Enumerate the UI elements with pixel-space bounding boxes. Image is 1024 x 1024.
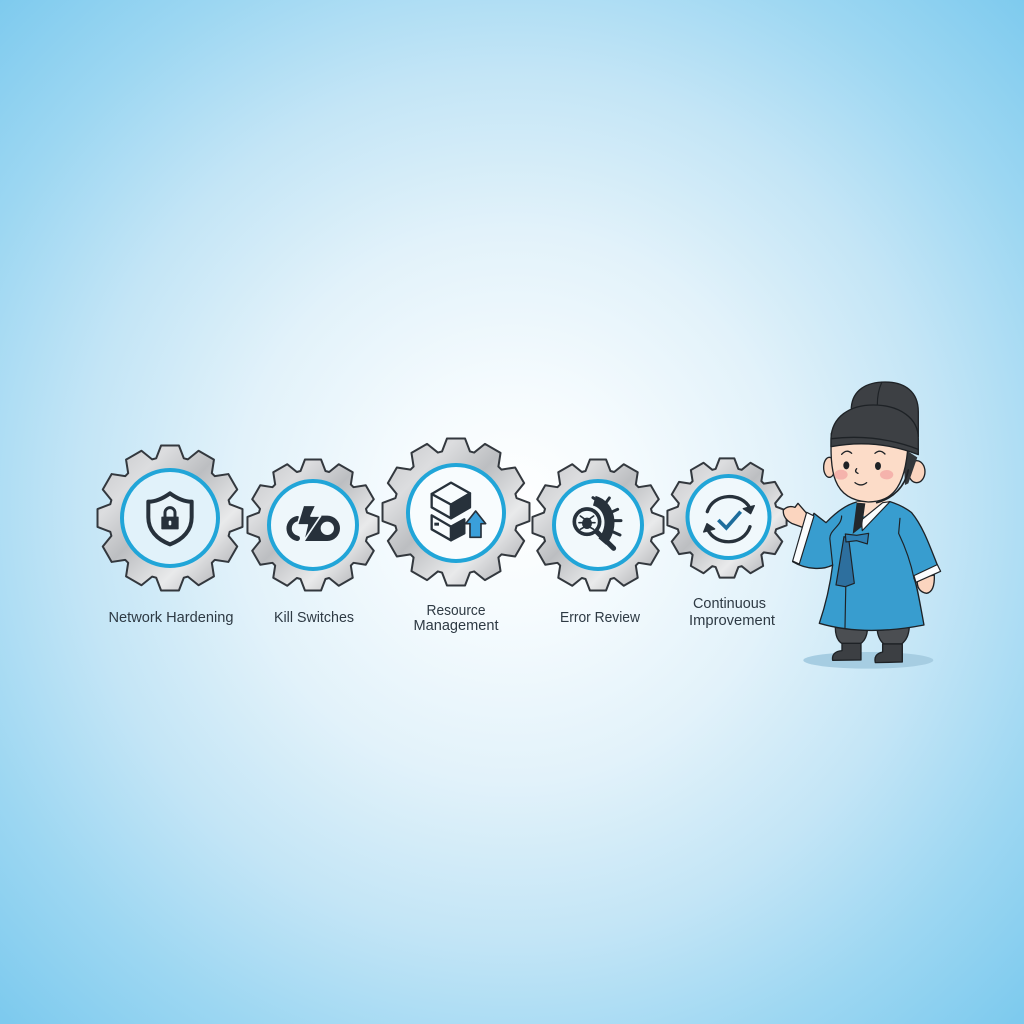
collar: [861, 502, 890, 531]
boots: [833, 643, 902, 663]
label: [414, 603, 498, 634]
gear 2: [247, 459, 379, 591]
gear 2 ring: [269, 481, 357, 569]
step: Resource Management: [383, 439, 529, 634]
label: Improvement: [689, 613, 775, 629]
icon: magnifier inspecting a bug: [574, 498, 621, 548]
icon: stacked boxes with upward arrow: [432, 483, 486, 540]
dark inner neck strap: [853, 503, 865, 534]
hat base: [831, 405, 918, 455]
neck skin: [857, 501, 890, 517]
label: Kill Switches: [274, 610, 354, 626]
hat crown seam: [877, 383, 882, 405]
step: Error Review: [532, 459, 664, 626]
chin strap: [877, 470, 908, 503]
hat band line: [831, 437, 918, 449]
step: Kill Switches: [247, 459, 379, 626]
robe: [793, 502, 939, 630]
gear 3 ring: [408, 465, 504, 561]
gear 3: [383, 439, 529, 585]
pointing hand: [783, 503, 807, 528]
label: Network Hardening: [108, 610, 234, 626]
icon: broken link with lightning bolt: [289, 505, 340, 542]
left cuff: [793, 512, 814, 564]
gear 1 ring: [122, 470, 218, 566]
right ear: [908, 461, 925, 483]
trousers: [835, 627, 909, 644]
eyes: [843, 461, 881, 470]
label: Continuous: [693, 596, 766, 612]
gear 1: [98, 446, 242, 590]
gear 4 ring: [554, 481, 642, 569]
face: [831, 433, 909, 502]
hair at side: [903, 448, 917, 485]
character: scholar in blue hanbok: [783, 382, 941, 669]
robe seams: [830, 516, 914, 628]
label: Error Review: [560, 610, 641, 626]
label: Management: [414, 618, 498, 634]
gear 5 ring: [688, 476, 770, 558]
ribbon bow: [845, 533, 869, 544]
label: Resource: [426, 603, 486, 619]
step: Network Hardening: [98, 446, 242, 626]
eyebrows, nose, smile: [842, 451, 885, 485]
gear 4: [532, 459, 664, 591]
right hand: [917, 575, 934, 593]
blush: [834, 470, 893, 480]
ribbon tails: [836, 537, 854, 587]
gear 5: [667, 458, 787, 578]
right cuff: [914, 565, 941, 582]
hat top: [851, 382, 918, 437]
left ear: [824, 457, 835, 477]
ground shadow: [803, 652, 933, 669]
label: [689, 596, 775, 629]
icon: cycle arrows with check mark: [704, 497, 754, 542]
icon: shield with padlock: [148, 493, 192, 544]
step: Continuous Improvement: [667, 458, 787, 629]
